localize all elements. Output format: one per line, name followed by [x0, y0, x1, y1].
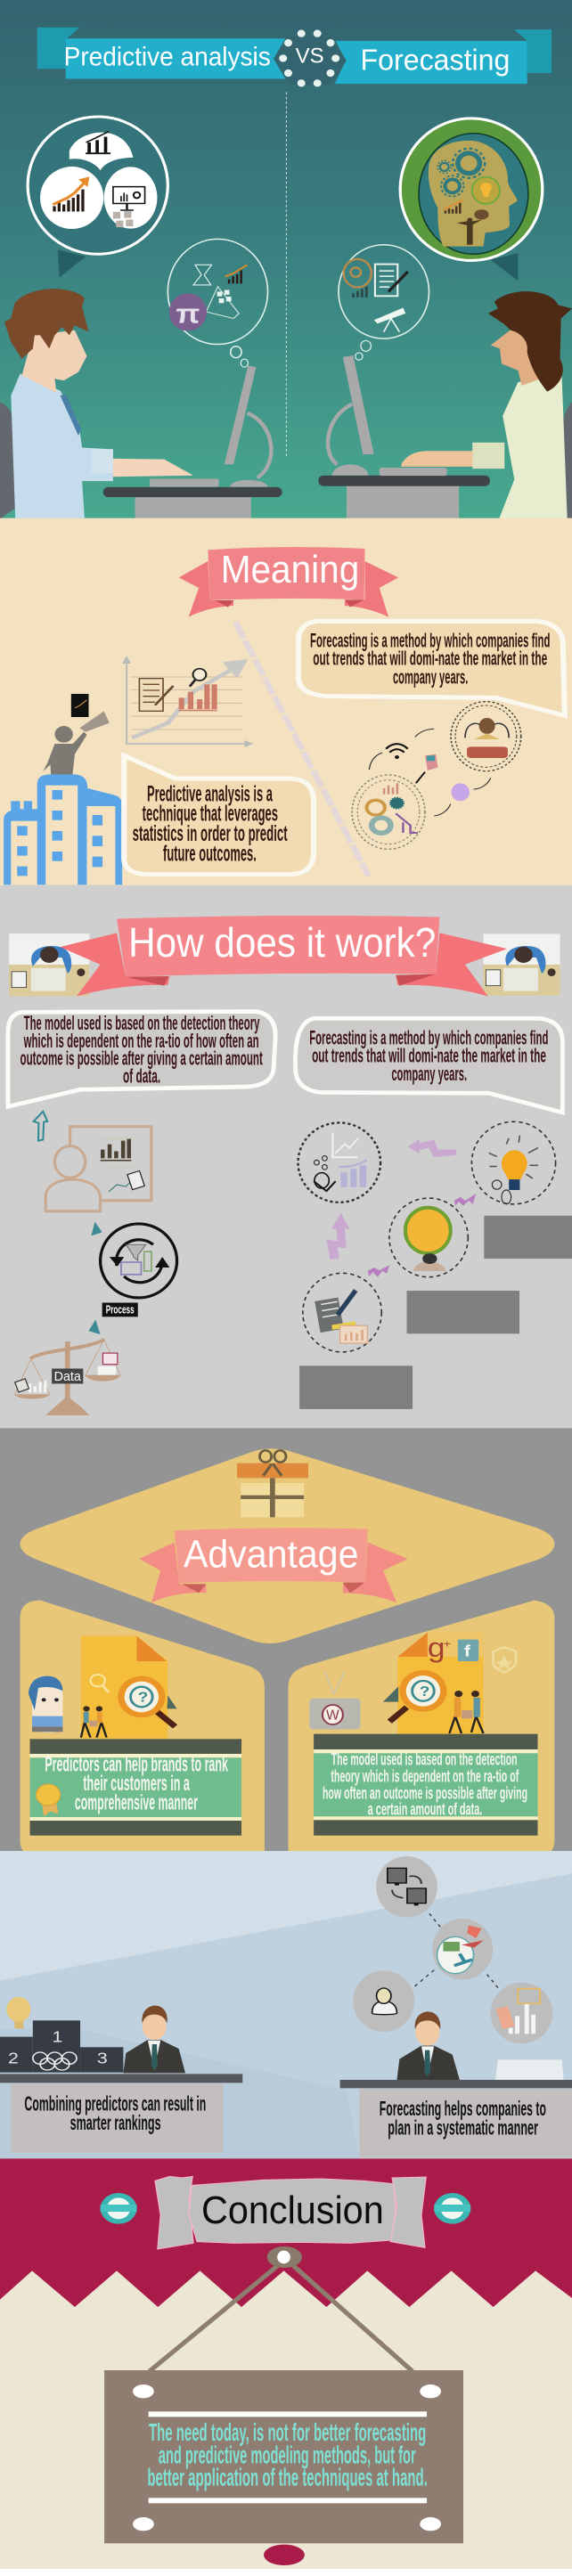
podium icon	[0, 1997, 123, 2073]
section: predictive analysis vs forecasting header	[0, 0, 572, 519]
conclusion scroll heading	[155, 2176, 426, 2249]
icon: WordPress on TV	[323, 1705, 343, 1724]
panel: left advantage: Predictors can help brands to rank	[45, 1752, 228, 1776]
forecasting cycle	[298, 1121, 572, 1409]
panel: left advantage	[20, 1601, 265, 1852]
callout: forecasting method: company years.	[391, 1063, 467, 1085]
callout: predictive analysis definition: future outcomes.	[163, 841, 257, 866]
badge: brain and gears head	[400, 118, 543, 281]
podium icon: 2	[8, 2050, 19, 2067]
panel: left advantage: their customers in a	[83, 1772, 190, 1795]
bottom dot	[264, 2545, 305, 2565]
panel: right advantage: f	[464, 1643, 470, 1660]
icon: magnifier	[118, 1676, 176, 1726]
laptop	[495, 2059, 564, 2080]
section: business benefits: Combining predictors can result in	[24, 2091, 206, 2115]
callout: predictive analysis definition: technique that leverages	[143, 801, 278, 826]
podium icon: 3	[97, 2050, 108, 2067]
icon: two people carrying box	[81, 1706, 107, 1738]
thought bubble: predictive	[168, 239, 268, 367]
section: conclusion	[0, 2158, 572, 2576]
network of forecasting icons	[352, 702, 521, 849]
icon: helpdesk mascot	[29, 1676, 63, 1732]
teal badge left	[101, 2193, 137, 2224]
how does it work ribbon heading: How does it work?	[128, 920, 436, 966]
thought bubble: predictive: π	[176, 298, 200, 329]
gift icon	[237, 1450, 308, 1517]
icon: two people carrying box	[449, 1691, 484, 1733]
panel: right advantage: g	[428, 1633, 445, 1663]
growth chart illustration	[122, 656, 254, 747]
podium icon: 1	[53, 2028, 62, 2046]
section: meaning	[0, 518, 572, 886]
callout: predictive analysis definition	[124, 755, 314, 875]
title banner: Forecasting	[361, 45, 510, 77]
teal badge right	[434, 2193, 470, 2224]
desk and monitor	[103, 365, 282, 519]
callout: model definition	[8, 1012, 275, 1106]
how does it work ribbon heading	[61, 916, 507, 997]
data to process flow: Data	[54, 1369, 81, 1384]
section: how does it work	[0, 885, 572, 1430]
panel: right advantage	[288, 1601, 554, 1852]
callout: model definition: which is dependent on the ra-tio of how often an	[23, 1030, 259, 1052]
man at computer	[0, 289, 282, 519]
thought bubble: forecasting	[339, 245, 429, 360]
callout: forecasting definition: company years.	[393, 667, 468, 689]
panel: right advantage: +	[443, 1638, 451, 1650]
meaning ribbon heading: Meaning	[221, 549, 359, 591]
desk illustration right	[484, 934, 560, 996]
section: advantage	[0, 1428, 572, 1852]
icon: magnifier	[389, 1670, 447, 1722]
callout: model definition: of data.	[123, 1065, 160, 1087]
data to process flow: Process	[106, 1303, 135, 1316]
desk and monitor	[318, 355, 490, 519]
icon: WordPress on TV: W	[326, 1707, 339, 1723]
callout: model definition: The model used is based on the detection theory	[24, 1012, 260, 1034]
section: business benefits	[0, 1851, 572, 2158]
businessman right	[396, 2011, 460, 2080]
advantage ribbon heading	[139, 1528, 408, 1602]
title banner	[37, 28, 552, 86]
title banner: VS	[296, 44, 324, 68]
text box: systematic planning	[359, 2089, 572, 2157]
conclusion scroll heading: Conclusion	[201, 2189, 384, 2232]
title banner: Predictive analysis	[64, 43, 271, 71]
data to process flow	[14, 1112, 177, 1415]
panel: left advantage: comprehensive manner	[75, 1790, 198, 1814]
meaning ribbon heading	[179, 547, 398, 617]
callout: predictive analysis definition: Predictive analysis is a	[147, 781, 273, 806]
advantage ribbon heading: Advantage	[184, 1533, 358, 1576]
hanging sign	[104, 2246, 463, 2543]
icon: rank medal	[37, 1784, 61, 1816]
conclusion text	[147, 2418, 428, 2491]
icon: magnifier: ?	[420, 1683, 429, 1700]
woman at computer	[318, 291, 572, 519]
advantage diamond panel	[20, 1448, 554, 1643]
callout: forecasting method	[295, 1018, 562, 1113]
callout: predictive analysis definition: statistics in order to predict	[133, 821, 288, 845]
callout: forecasting definition	[298, 621, 565, 715]
icon: magnifier: ?	[138, 1689, 148, 1705]
businessman left	[123, 2006, 185, 2073]
text box: smarter rankings: smarter rankings	[70, 2111, 161, 2134]
text box: smarter rankings	[11, 2083, 224, 2153]
person with telescope on building	[4, 694, 122, 884]
callout: model definition: outcome is possible after giving a certain amount	[20, 1048, 263, 1070]
network bubbles	[353, 1856, 552, 2043]
desk illustration left	[9, 933, 89, 997]
badge: analytics icons	[28, 117, 168, 278]
